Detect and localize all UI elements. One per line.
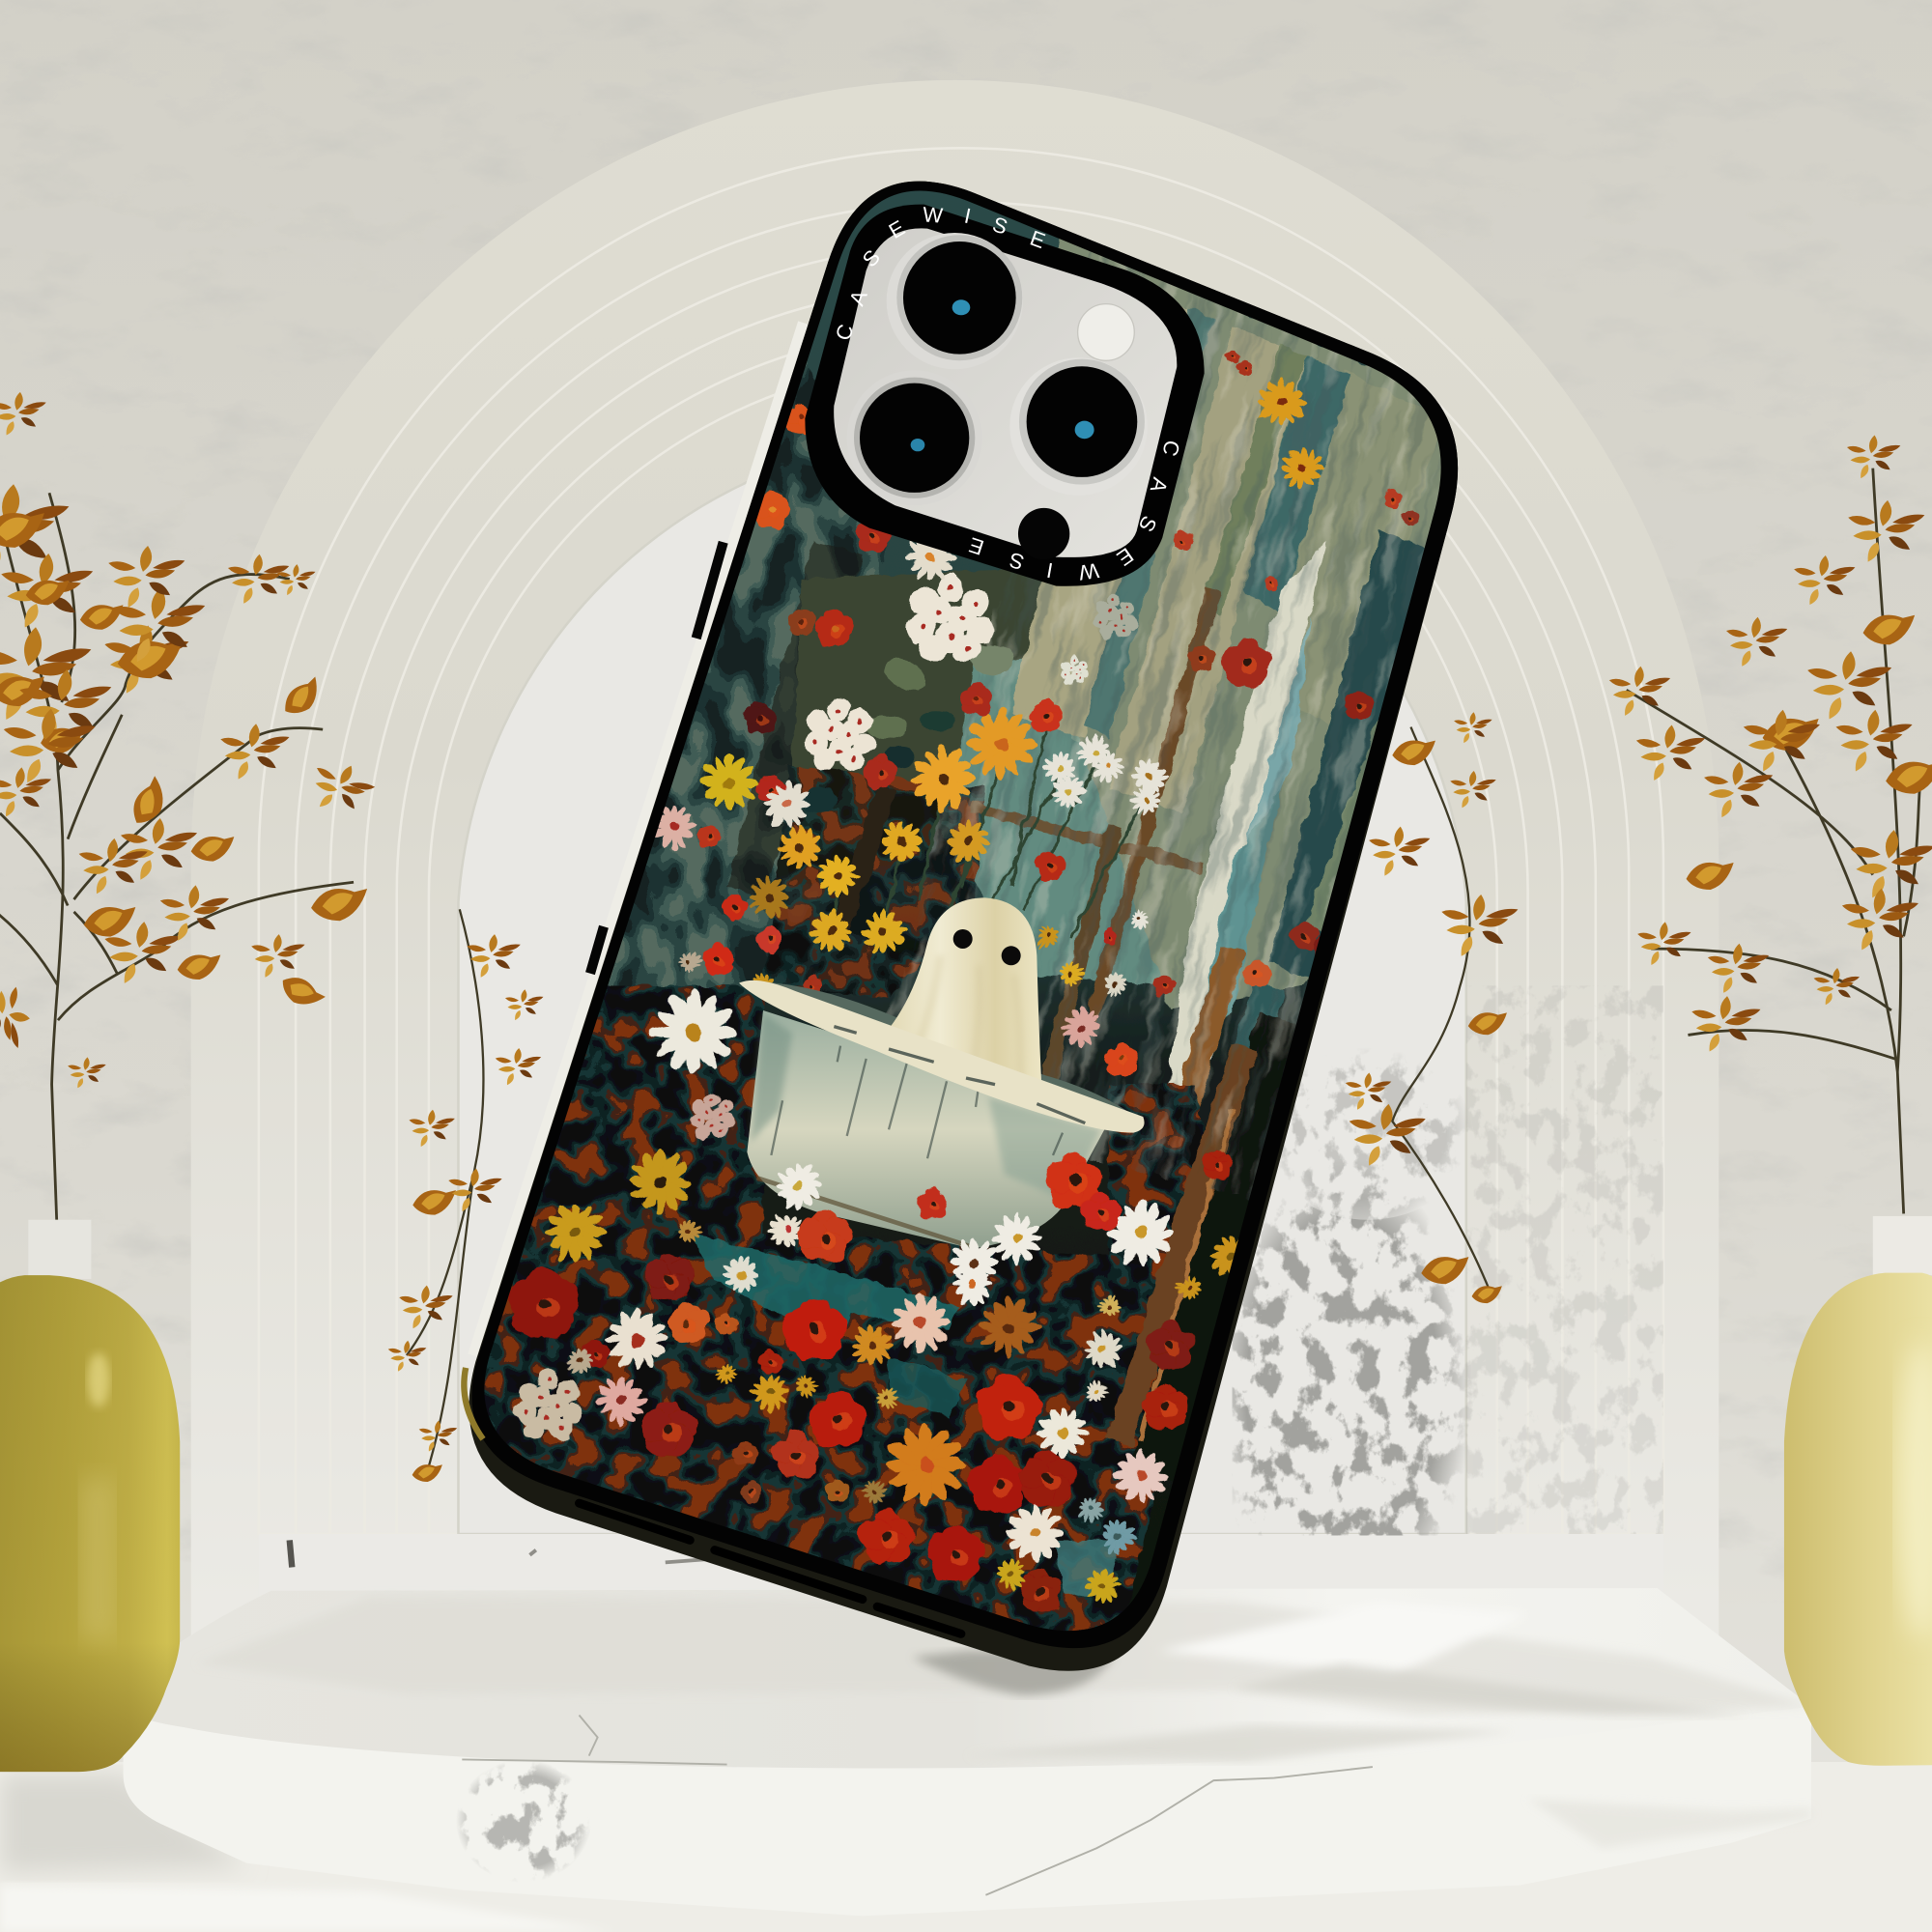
phone shadow on plinth [912,1651,1115,1695]
left branch plant [0,392,379,1220]
camera module [805,202,1205,586]
bottom ports [579,1503,961,1634]
right branch plant [1609,436,1932,1213]
phone camera plate [834,228,1177,557]
tub rim [739,980,1145,1133]
glossy case shell [469,182,1458,1671]
lidar sensor [1018,508,1069,559]
marble veins on niche wall [1233,1035,1472,1535]
lower flowers [507,990,1254,1611]
marble floor [0,1762,1932,1932]
vine behind phone right [1346,712,1518,1303]
gold reflection on corner [464,1368,483,1439]
CASEWISE ring lettering: E [966,532,987,560]
tub drips [771,1046,1063,1158]
left leaf clusters [0,392,379,1088]
CASEWISE ring lettering: I [962,204,973,228]
CASEWISE ring lettering: S [989,212,1010,240]
painted wall stripes [1047,234,1466,1010]
ghost in bathtub [739,897,1145,1249]
marble plinth [124,1588,1811,1916]
lens bottom left [847,370,982,505]
plinth top face [124,1588,1811,1769]
CASEWISE ring lettering: A [844,287,872,309]
CASEWISE ring lettering: A [1146,475,1173,496]
CASEWISE ring lettering: E [1113,543,1138,571]
teal platform below tub [694,1235,960,1331]
upper flowers [651,351,1419,1076]
CASEWISE ring lettering: C [1157,438,1185,459]
CASEWISE ring lettering: W [922,202,944,228]
ghost [886,897,1041,1088]
lens top [887,233,1023,369]
foliage behind white flowers [788,569,1041,887]
ghost eyes [953,929,1021,965]
paint streak texture [886,251,1439,1200]
dense lower meadow [485,983,1206,1631]
side buttons [590,542,724,974]
CASEWISE ring lettering: C [831,321,859,343]
CASEWISE ring lettering: S [858,245,885,271]
stems [826,727,1150,949]
case artwork [485,191,1441,1631]
CASEWISE ring lettering: S [1007,548,1027,575]
CASEWISE ring lettering: I [1044,558,1055,582]
pale streak on the wall [1164,542,1324,1109]
flash [1078,304,1134,360]
tub body [747,1010,1104,1249]
translucent side of case [473,323,804,1355]
CASEWISE ring lettering: E [1027,226,1048,253]
arch niche [191,80,1719,1651]
plinth marble veins [458,1764,587,1876]
right leaf clusters [1609,436,1932,1052]
vine behind phone left [388,909,543,1482]
CASEWISE ring lettering: E [885,215,909,243]
teal left wall [608,361,888,988]
CASEWISE ring lettering: W [1077,558,1100,585]
phone case bezel [471,182,1458,1648]
camera ring bezel [805,205,1205,586]
CASEWISE ring lettering: S [1134,512,1162,536]
CASEWISE ring lettering [831,202,1185,585]
lens right [1009,357,1148,496]
right gold vase [1784,1216,1932,1766]
green leaves [801,644,1014,813]
phone [461,182,1459,1671]
plinth front face [124,1588,1811,1916]
left gold vase [0,1220,180,1772]
